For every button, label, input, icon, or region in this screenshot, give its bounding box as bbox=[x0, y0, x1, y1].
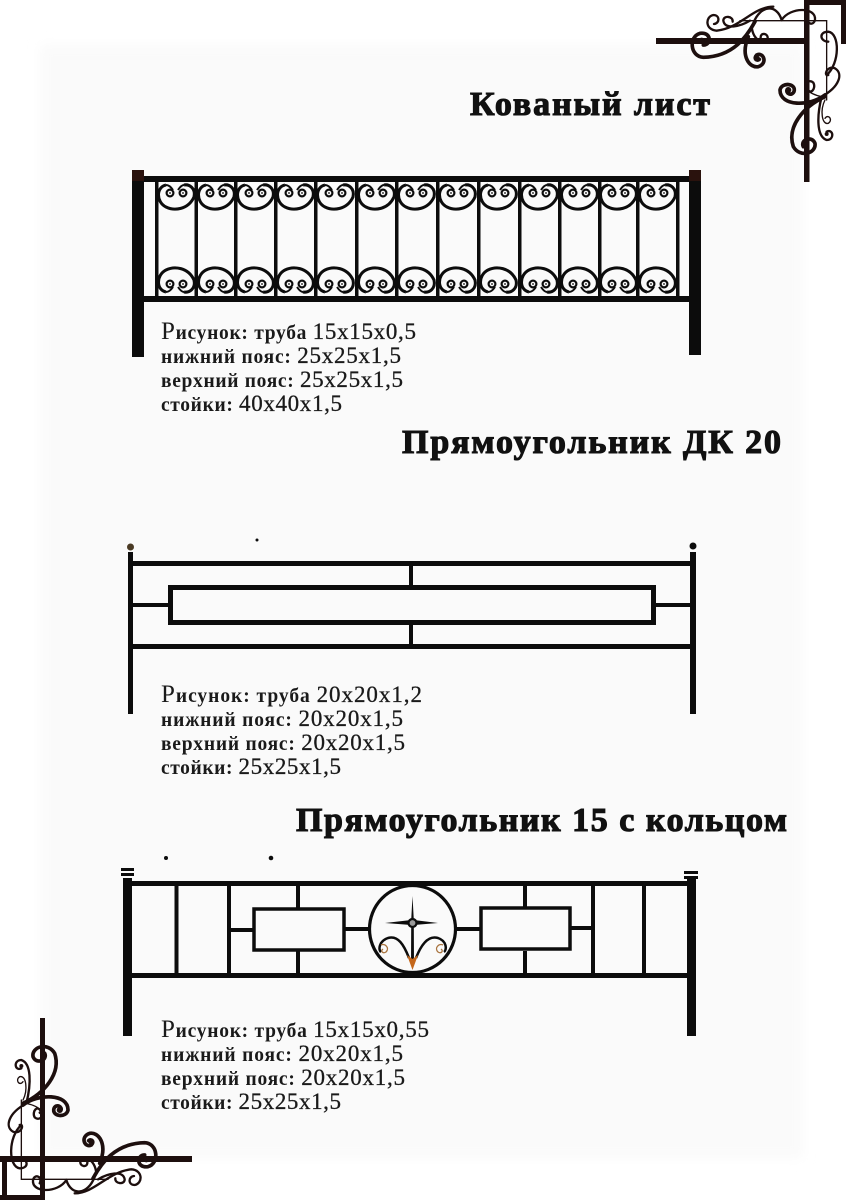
scrollwork bottom left bbox=[9, 1047, 156, 1193]
fence 3 rectangles bbox=[254, 908, 570, 950]
specs: rectangle DK 20: верхний пояс: 20x20x1,5 bbox=[161, 730, 405, 755]
fence 2 central rectangle bbox=[170, 588, 654, 622]
specs: rectangle 15 with ring bbox=[161, 1016, 429, 1114]
fence 2: rectangle DK 20 bbox=[127, 538, 696, 714]
fence 2 posts and finials bbox=[127, 538, 696, 714]
fence 2 rails bbox=[133, 561, 690, 649]
fence 1 top scrolls bbox=[158, 185, 675, 209]
fence 1 bottom scrolls bbox=[158, 268, 675, 292]
heading: rectangle 15 with ring: Прямоугольник 15 с кольцом bbox=[296, 802, 787, 839]
specs: forged sheet: нижний пояс: 25x25x1,5 bbox=[161, 343, 401, 368]
specs: rectangle DK 20: стойки: 25x25x1,5 bbox=[161, 754, 341, 779]
fence 1 pickets bbox=[155, 182, 680, 296]
specs: forged sheet: верхний пояс: 25x25x1,5 bbox=[161, 367, 403, 392]
fence 1 rails bbox=[144, 176, 689, 302]
specs: forged sheet: Рисунок: труба 15x15x0,5 bbox=[161, 318, 416, 345]
specs: forged sheet bbox=[161, 318, 416, 416]
specs: rectangle 15 with ring: Рисунок: труба 15x15x0,55 bbox=[161, 1016, 429, 1043]
fence 3: rectangle 15 with ring bbox=[121, 856, 698, 1036]
fence 1: forged sheet bbox=[132, 170, 701, 357]
fence 3 posts bbox=[121, 856, 698, 1036]
heading: rectangle DK 20: Прямоугольник ДК 20 bbox=[402, 424, 781, 461]
specs: rectangle 15 with ring: стойки: 25x25x1,5 bbox=[161, 1089, 341, 1114]
specs: rectangle DK 20: Рисунок: труба 20x20x1,2 bbox=[161, 681, 422, 708]
specs: rectangle DK 20 bbox=[161, 681, 422, 779]
specs: forged sheet: стойки: 40x40x1,5 bbox=[161, 391, 342, 416]
heading: forged sheet: Кованый лист bbox=[470, 86, 710, 123]
fence 3 ring with cross bbox=[370, 886, 456, 972]
corner ornament: top right bbox=[656, 0, 846, 182]
scrollwork top right bbox=[692, 7, 839, 153]
specs: rectangle DK 20: нижний пояс: 20x20x1,5 bbox=[161, 706, 403, 731]
fence 3 rails and bars bbox=[132, 881, 687, 978]
corner ornament: bottom left bbox=[0, 1018, 192, 1200]
specs: rectangle 15 with ring: нижний пояс: 20x20x1,5 bbox=[161, 1041, 403, 1066]
specs: rectangle 15 with ring: верхний пояс: 20x20x1,5 bbox=[161, 1065, 405, 1090]
fence 1 posts bbox=[132, 170, 701, 357]
